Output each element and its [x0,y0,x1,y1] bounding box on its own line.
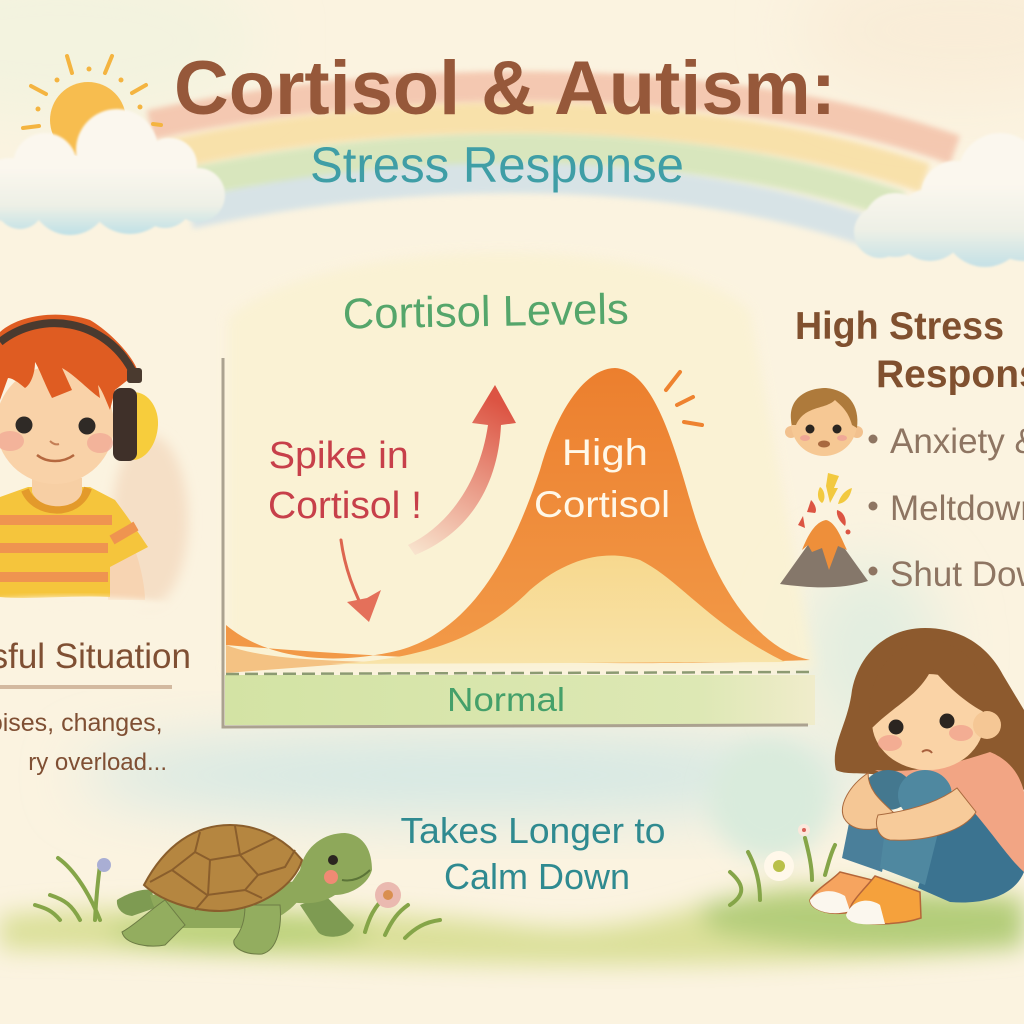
left fill under curve [226,645,370,673]
right arm [876,788,976,840]
heading: cortisol levels: Cortisol Levels [342,286,629,338]
heading: high stress response: High Stress [795,305,1004,348]
turtle far front leg [300,895,354,937]
right shin [880,825,940,885]
turtle back leg [117,890,155,916]
decoration: grass tufts and flowers [35,824,835,938]
list: symptoms [868,422,1024,594]
character: boy with headphones [0,315,158,600]
high cortisol curve [226,368,810,663]
icon: worried child face [785,388,863,456]
shirt [0,487,148,598]
icon: right cloud [854,133,1024,267]
axes [223,358,808,727]
ground: grass [0,885,1024,965]
icon: peak sparks [666,372,702,425]
panel: chart backdrop [228,253,815,670]
turtle head [280,833,372,903]
title: Cortisol & Autism: [174,46,836,131]
turtle rear foot [122,900,185,946]
subtitle: Stress Response [310,137,684,193]
label: spike in cortisol: Cortisol ! [268,485,422,527]
hair back [835,628,1024,790]
left shin [842,818,890,872]
shirt [875,752,1024,872]
fringe [870,640,985,728]
normal threshold [226,672,812,674]
character: girl hugging knees [810,628,1024,924]
text: triggers: ry overload... [28,749,167,776]
normal band [225,675,815,725]
label: spike in cortisol: Spike in [269,435,409,477]
text: takes longer to calm down: Calm Down [444,856,630,897]
face [872,674,984,770]
hair [0,315,138,410]
head [0,366,114,484]
turtle front foot [234,905,280,954]
arm [108,550,145,600]
label: high cortisol: Cortisol [534,484,670,525]
cloud edge under boy [0,597,170,615]
left arm [842,773,893,829]
icon: turtle [117,825,372,954]
collar [25,488,88,510]
rainbow [150,86,955,234]
shirt stripes [0,520,136,577]
label: high cortisol: High [562,432,648,473]
divider [0,685,172,689]
headphones band [0,323,133,372]
left knee [864,770,912,810]
icon: volcano [780,473,868,587]
text: takes longer to calm down: Takes Longer to [400,810,665,851]
chart: cortisol curve [223,358,815,727]
arrow: down to curve [341,540,381,622]
neck [32,478,82,506]
inner pale hill [330,555,785,664]
headphone cup [133,392,158,460]
turtle shell [144,825,302,911]
icon: sun [23,56,161,158]
right shoe [849,876,921,924]
right knee [898,770,952,820]
left shoe [810,872,880,913]
label: normal: Normal [447,681,565,718]
icon: left cloud [0,109,225,235]
hips and thigh [918,810,1024,903]
turtle body [150,880,310,928]
arrow: rising [408,385,516,555]
